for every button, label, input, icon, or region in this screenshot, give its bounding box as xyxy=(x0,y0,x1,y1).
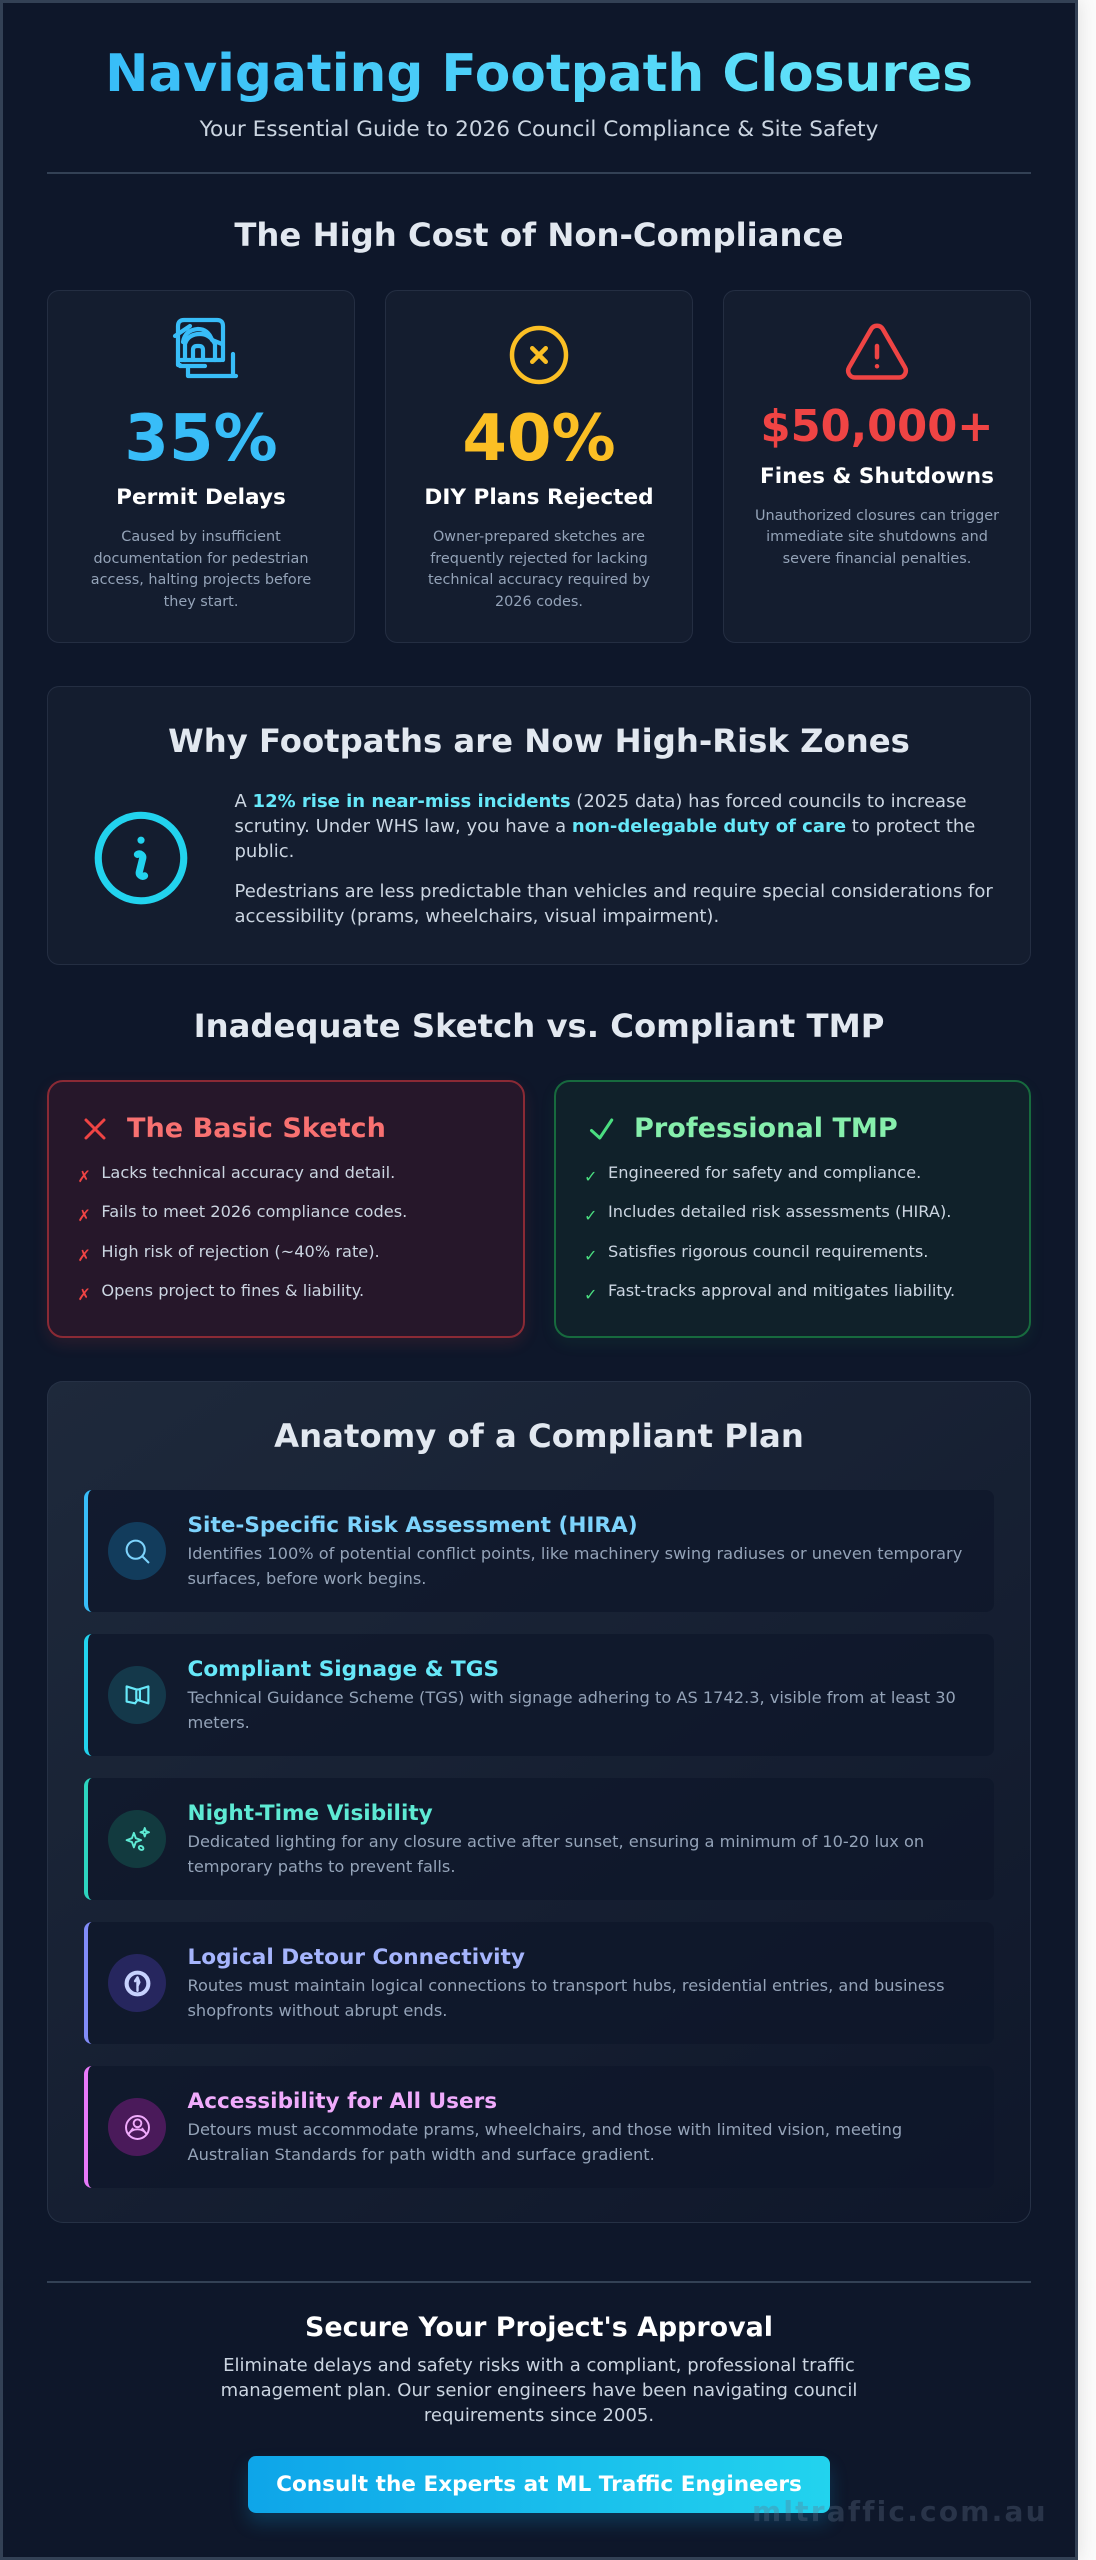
text: near-miss paragraph xyxy=(234,791,975,862)
item title: Logical Detour Connectivity xyxy=(188,1945,525,1970)
text: near-miss paragraph: public. xyxy=(234,841,294,862)
text: call to action: requirements since 2005. xyxy=(424,2405,654,2426)
panel: anatomy of a compliant plan xyxy=(47,1381,1031,2223)
list item: Satisfies rigorous council requirements. xyxy=(608,1242,928,1260)
subtitle: Your Essential Guide to 2026 Council Compliance & Site Safety xyxy=(200,116,878,142)
list item: Fails to meet 2026 compliance codes. xyxy=(101,1202,407,1221)
label: permit delays: Permit Delays xyxy=(116,485,286,510)
panel: the basic sketch xyxy=(47,1080,525,1338)
heading: Why Footpaths are Now High-Risk Zones xyxy=(168,722,910,760)
label: fines and shutdowns: Fines & Shutdowns xyxy=(760,464,994,489)
item description: Technical Guidance Scheme (TGS) with signage adhering to AS 1742.3, visible from at least 30 xyxy=(188,1688,956,1707)
text: call to action xyxy=(221,2354,857,2426)
text: pedestrians paragraph xyxy=(234,881,993,927)
icon: info circle xyxy=(94,812,188,904)
item title: Compliant Signage & TGS xyxy=(188,1657,499,1682)
panel: professional tmp: ✓ xyxy=(584,1206,597,1225)
panel: why footpaths are high risk xyxy=(47,686,1031,965)
button: consult the experts: Consult the Experts at ML Traffic Engineers xyxy=(276,2472,802,2497)
description xyxy=(755,508,1000,567)
item description: Routes must maintain logical connections to transport hubs, residential entries, and business xyxy=(188,1976,945,1995)
stat: 40%: 40% xyxy=(462,402,616,476)
panel: the basic sketch: ✗ xyxy=(77,1246,91,1264)
panel: diy plans rejected xyxy=(385,290,693,643)
text: near-miss paragraph: A 12% rise in near-miss incidents (2025 data) has forced councils to increase xyxy=(234,791,967,812)
description xyxy=(91,529,311,610)
description: severe financial penalties. xyxy=(783,551,971,567)
button: consult the experts xyxy=(248,2456,830,2513)
description: 2026 codes. xyxy=(495,594,583,610)
description: Caused by insufficient xyxy=(121,529,281,545)
panel: professional tmp xyxy=(554,1080,1031,1338)
list item: Engineered for safety and compliance. xyxy=(608,1163,921,1182)
heading: sketch vs tmp: Inadequate Sketch vs. Compliant TMP xyxy=(194,1007,884,1045)
item description xyxy=(188,2120,902,2164)
icon: permit document xyxy=(172,318,238,378)
item description: Detours must accommodate prams, wheelchairs, and those with limited vision, meeting xyxy=(188,2120,902,2139)
item description: temporary paths to prevent falls. xyxy=(188,1857,456,1876)
watermark: mltraffic.com.au xyxy=(752,2494,1048,2528)
list item: Lacks technical accuracy and detail. xyxy=(101,1163,395,1182)
description: Owner-prepared sketches are xyxy=(433,529,645,545)
item description xyxy=(188,1544,962,1588)
text: near-miss paragraph: scrutiny. Under WHS law, you have a non-delegable duty of care to protect the xyxy=(234,816,975,837)
heading: Anatomy of a Compliant Plan xyxy=(274,1417,804,1455)
icon: check mark xyxy=(590,1118,614,1140)
heading: the basic sketch: The Basic Sketch xyxy=(127,1113,386,1144)
item description: shopfronts without abrupt ends. xyxy=(188,2001,447,2020)
item: risk assessment xyxy=(84,1490,994,1612)
text: pedestrians paragraph: accessibility (prams, wheelchairs, visual impairment). xyxy=(234,906,719,927)
list item: Includes detailed risk assessments (HIRA). xyxy=(608,1202,951,1221)
item: accessibility xyxy=(84,2066,994,2188)
stat: $50,000+: $50,000+ xyxy=(761,402,993,452)
list item: High risk of rejection (~40% rate). xyxy=(101,1242,380,1260)
description: Unauthorized closures can trigger xyxy=(755,508,999,524)
panel: professional tmp: ✓ xyxy=(584,1246,597,1264)
heading: the high cost: The High Cost of Non-Compliance xyxy=(234,216,844,254)
icon: user circle xyxy=(108,2098,166,2156)
icon: x mark xyxy=(84,1118,106,1140)
icon: warning triangle xyxy=(846,324,908,380)
item description xyxy=(188,1976,945,2020)
item title: Site-Specific Risk Assessment (HIRA) xyxy=(188,1513,638,1538)
item description xyxy=(187,1688,956,1732)
title: Navigating Footpath Closures xyxy=(105,44,973,104)
label: diy plans rejected: DIY Plans Rejected xyxy=(424,485,654,510)
description: they start. xyxy=(164,594,238,610)
list item: Opens project to fines & liability. xyxy=(101,1281,364,1300)
list item: Fast-tracks approval and mitigates liability. xyxy=(608,1281,955,1300)
description: documentation for pedestrian xyxy=(94,551,308,567)
description: immediate site shutdowns and xyxy=(766,529,988,545)
text: pedestrians paragraph: Pedestrians are less predictable than vehicles and require special considerations for xyxy=(234,881,993,902)
panel: the basic sketch: ✗ xyxy=(77,1167,91,1186)
icon: map xyxy=(108,1666,166,1724)
icon: arrow circle xyxy=(108,1954,166,2012)
panel: fines and shutdowns xyxy=(723,290,1031,643)
item title: Accessibility for All Users xyxy=(188,2089,497,2114)
panel: professional tmp: ✓ xyxy=(584,1285,597,1304)
text: call to action: Eliminate delays and safety risks with a compliant, professional traffic xyxy=(223,2354,855,2376)
icon: magnifying glass xyxy=(108,1522,166,1580)
item: signage xyxy=(84,1634,994,1756)
item description: surfaces, before work begins. xyxy=(188,1569,426,1588)
description xyxy=(428,529,650,610)
panel: permit delays xyxy=(47,290,355,643)
heading: secure your project's approval: Secure Your Project's Approval xyxy=(305,2312,773,2342)
description: frequently rejected for lacking xyxy=(430,551,648,567)
panel: the basic sketch: ✗ xyxy=(77,1206,91,1225)
item: night-time visibility xyxy=(84,1778,994,1900)
item description: Dedicated lighting for any closure active after sunset, ensuring a minimum of 10-20 lux on xyxy=(188,1832,924,1851)
item description: Identifies 100% of potential conflict points, like machinery swing radiuses or uneven temporary xyxy=(188,1544,962,1563)
icon: x circle xyxy=(510,326,568,384)
description: technical accuracy required by xyxy=(428,572,650,588)
item title: Night-Time Visibility xyxy=(188,1801,433,1826)
item description xyxy=(188,1832,924,1876)
description: access, halting projects before xyxy=(91,572,311,588)
panel: the basic sketch: ✗ xyxy=(77,1285,91,1304)
item description: Australian Standards for path width and surface gradient. xyxy=(188,2145,655,2164)
text: call to action: management plan. Our senior engineers have been navigating council xyxy=(221,2380,857,2401)
icon: sparkles xyxy=(108,1810,166,1868)
item description: meters. xyxy=(188,1713,250,1732)
stat: 35%: 35% xyxy=(124,402,278,476)
heading: professional tmp: Professional TMP xyxy=(634,1113,898,1144)
item: detour connectivity xyxy=(84,1922,994,2044)
panel: professional tmp: ✓ xyxy=(584,1167,597,1186)
